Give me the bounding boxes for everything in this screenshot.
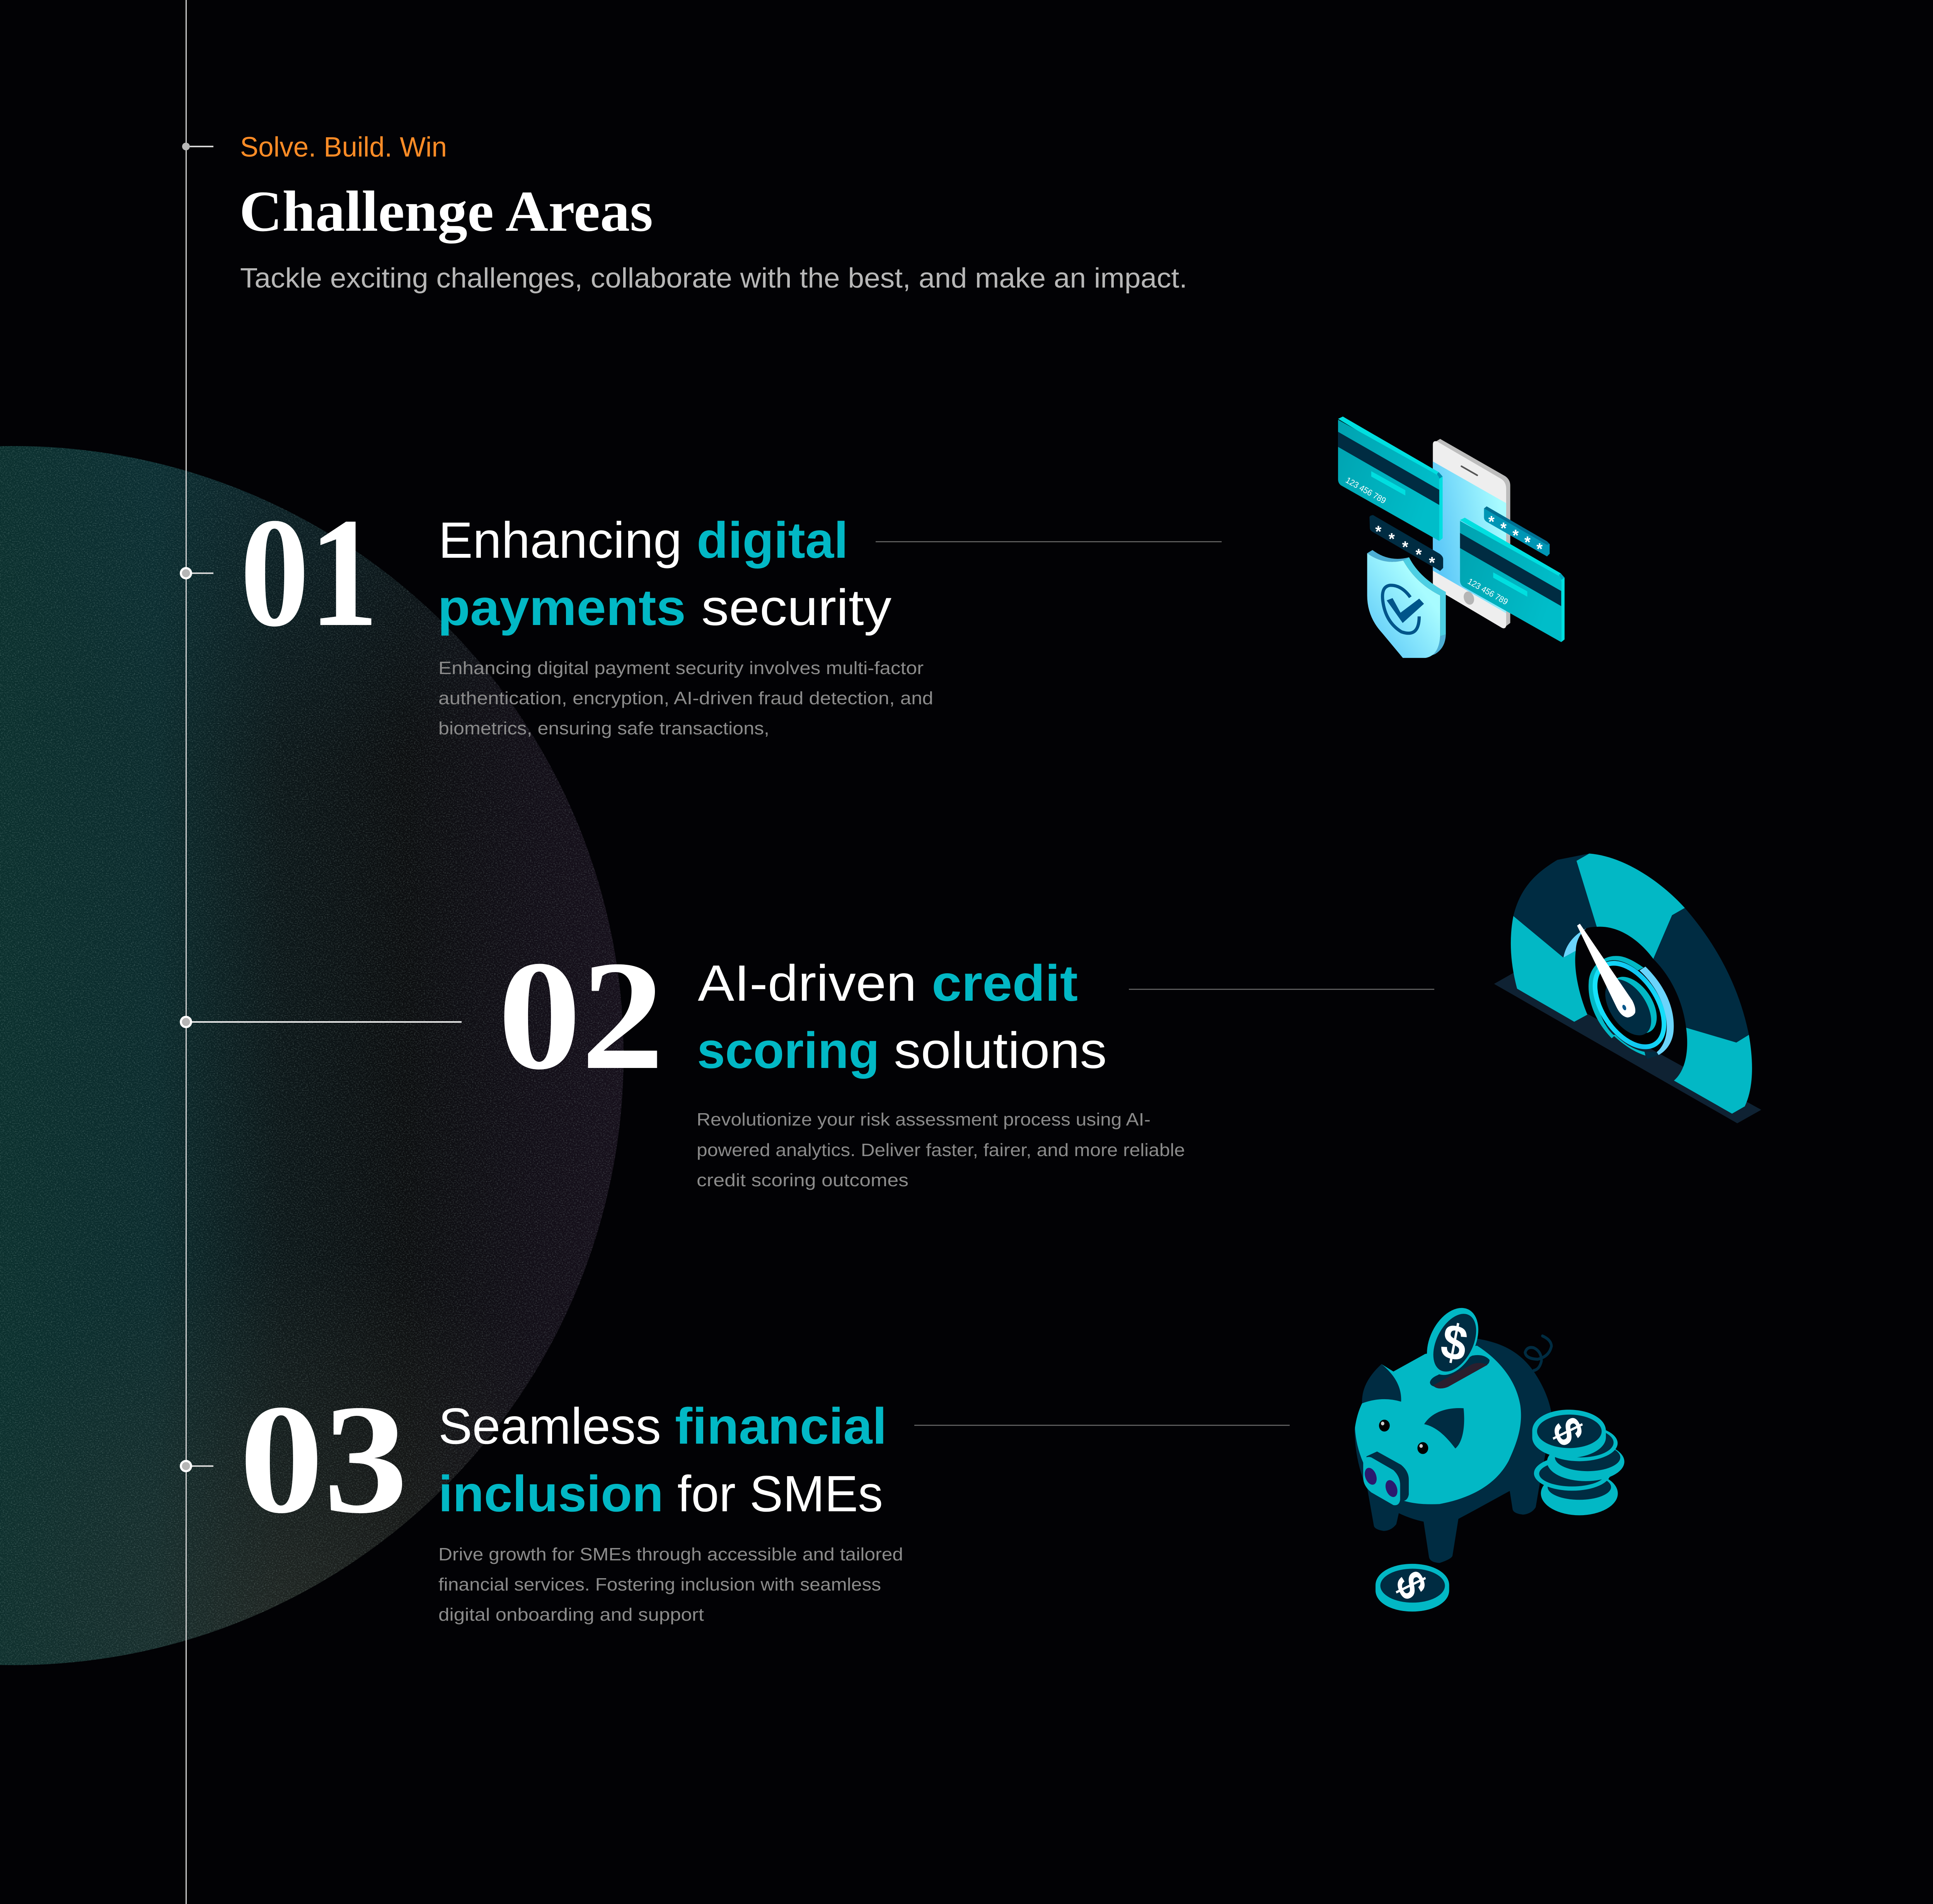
description 01: Enhancing digital payment security involves multi-factor — [438, 658, 924, 678]
description 03: digital onboarding and support — [438, 1604, 704, 1625]
challenge 03 — [239, 1372, 1290, 1625]
timeline node: 02 — [180, 1016, 462, 1028]
heading 03: financial — [675, 1398, 887, 1454]
description 03: Drive growth for SMEs through accessible and tailored — [438, 1544, 903, 1564]
header — [239, 132, 1187, 294]
heading 02: AI-driven — [698, 955, 917, 1012]
coin stack — [1532, 1410, 1624, 1515]
card: lower: 123 456 789 — [1466, 576, 1510, 607]
pig back and legs — [1355, 1339, 1552, 1563]
pig ear: near — [1362, 1364, 1401, 1403]
timeline node: 01 — [180, 567, 213, 579]
description 01 — [438, 658, 933, 738]
falling coin — [1417, 1298, 1489, 1385]
eyebrow: Solve. Build. Win — [240, 132, 447, 163]
password bar: dark: * — [1416, 546, 1422, 564]
divider 02 — [1129, 989, 1434, 990]
gauge segment: right — [1653, 908, 1749, 1042]
password bar: dark: * — [1402, 538, 1409, 556]
heading 01: digital — [697, 512, 848, 569]
heading 01: security — [701, 579, 891, 636]
divider 03 — [914, 1425, 1290, 1426]
timeline — [180, 0, 462, 1904]
gauge segment: left — [1511, 916, 1587, 1022]
password bar: teal — [1484, 506, 1549, 558]
heading 03: Seamless — [438, 1398, 661, 1454]
coin stack: $ — [1544, 1410, 1593, 1452]
heading 01: payments — [438, 579, 686, 636]
heading 01: Enhancing — [438, 512, 682, 569]
heading 02: credit — [932, 955, 1078, 1012]
gauge hub rings — [1581, 950, 1678, 1059]
password bar: teal: * — [1512, 527, 1519, 545]
loose coin: $ — [1387, 1564, 1436, 1606]
card: upper: 123 456 789 — [1344, 475, 1388, 506]
description 02: credit scoring outcomes — [697, 1170, 909, 1190]
falling coin: $ — [1437, 1313, 1472, 1373]
number 02: 02 — [498, 928, 664, 1102]
description 03 — [438, 1544, 903, 1625]
description 02: powered analytics. Deliver faster, fairer, and more reliable — [697, 1140, 1185, 1160]
description 01: biometrics, ensuring safe transactions, — [438, 718, 769, 738]
icon: credit score gauge — [1494, 853, 1761, 1123]
title: Challenge Areas — [239, 179, 653, 244]
password bar: teal: * — [1488, 513, 1495, 531]
background gradient orb — [0, 446, 624, 1665]
heading 03 — [438, 1398, 887, 1522]
gauge segment: top — [1577, 853, 1685, 959]
number 03: 03 — [239, 1372, 408, 1546]
number 01: 01 — [240, 485, 378, 659]
gauge base — [1494, 973, 1761, 1123]
challenge 01 — [240, 485, 1222, 738]
subtitle: Tackle exciting challenges, collaborate with the best, and make an impact. — [240, 263, 1187, 294]
pig snout — [1362, 1451, 1409, 1505]
password bar: teal: * — [1536, 540, 1543, 558]
pig eye: right — [1417, 1442, 1428, 1454]
pig tail — [1525, 1336, 1551, 1371]
challenge 02 — [498, 928, 1434, 1190]
heading 03: inclusion — [438, 1465, 663, 1522]
loose coin — [1376, 1564, 1449, 1611]
description 01: authentication, encryption, AI-driven fraud detection, and — [438, 688, 933, 708]
gauge needle — [1577, 924, 1635, 1018]
password bar: teal: * — [1524, 533, 1531, 551]
description 02 — [697, 1109, 1185, 1190]
heading 02 — [697, 955, 1107, 1079]
phone — [1433, 439, 1510, 628]
card: lower — [1460, 518, 1565, 642]
timeline node: 03 — [180, 1460, 213, 1472]
description 03: financial services. Fostering inclusion with seamless — [438, 1574, 881, 1594]
card: upper — [1338, 417, 1443, 541]
password bar: teal: * — [1500, 519, 1507, 537]
icon: phone, cards and shield — [1338, 417, 1565, 658]
gauge segment: upper left — [1514, 853, 1597, 957]
shield — [1367, 550, 1446, 658]
divider 01 — [876, 541, 1222, 542]
heading 02: scoring — [697, 1022, 880, 1079]
password bar: dark — [1369, 515, 1443, 572]
password bar: dark: * — [1429, 554, 1435, 572]
password bar: dark: * — [1375, 523, 1382, 540]
pig body — [1355, 1346, 1521, 1504]
gauge segment: lower right — [1674, 1028, 1752, 1114]
heading 02: solutions — [894, 1022, 1107, 1079]
gauge inner edge — [1563, 928, 1587, 957]
pig eye: left — [1379, 1420, 1390, 1432]
pig ear: far — [1424, 1408, 1464, 1449]
icon: piggy bank and coins — [1355, 1298, 1624, 1611]
password bar: dark: * — [1389, 530, 1395, 548]
description 02: Revolutionize your risk assessment process using AI- — [697, 1109, 1151, 1129]
timeline node: header — [182, 143, 213, 150]
heading 01 — [438, 512, 891, 636]
coin slot — [1430, 1355, 1490, 1388]
heading 03: for SMEs — [677, 1465, 883, 1522]
